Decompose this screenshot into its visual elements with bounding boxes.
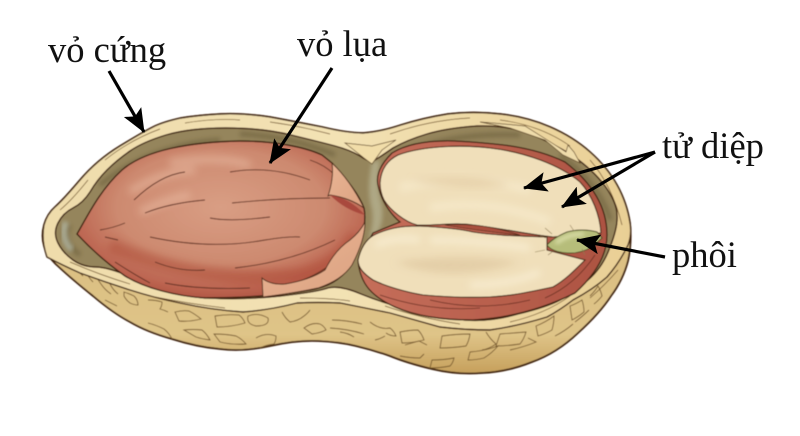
arrow: vỏ lụa to kernel skin xyxy=(270,68,332,163)
septum between chambers xyxy=(368,160,382,240)
arrows: tử diệp to both cotyledons xyxy=(524,152,655,207)
label: tử diệp: tử diệp xyxy=(662,125,764,166)
torn shell edge at top right xyxy=(480,122,580,163)
upper cotyledon xyxy=(380,146,601,237)
papery skin flap, upper xyxy=(328,163,364,208)
label: vỏ cứng: vỏ cứng xyxy=(48,29,166,70)
label: vỏ lụa: vỏ lụa xyxy=(297,23,387,64)
arrow: phôi to embryo xyxy=(577,240,665,257)
rim: light cut edge of shell xyxy=(43,112,631,330)
kernel highlights xyxy=(130,159,250,212)
papery skin flap, lower xyxy=(262,222,365,297)
shell texture: net cells on lower band xyxy=(75,268,602,368)
inner cavity of shell xyxy=(56,122,617,320)
embryo xyxy=(535,225,602,255)
arrow: vỏ cứng to shell xyxy=(109,71,144,132)
label: phôi: phôi xyxy=(672,234,737,275)
outer shell xyxy=(42,112,631,374)
lower cotyledon xyxy=(358,224,585,297)
illustration: open peanut pod xyxy=(42,112,631,374)
right kernel: seed coat edge xyxy=(358,141,607,320)
kernel skin creases xyxy=(100,160,335,288)
left kernel in red-brown skin xyxy=(77,141,365,298)
